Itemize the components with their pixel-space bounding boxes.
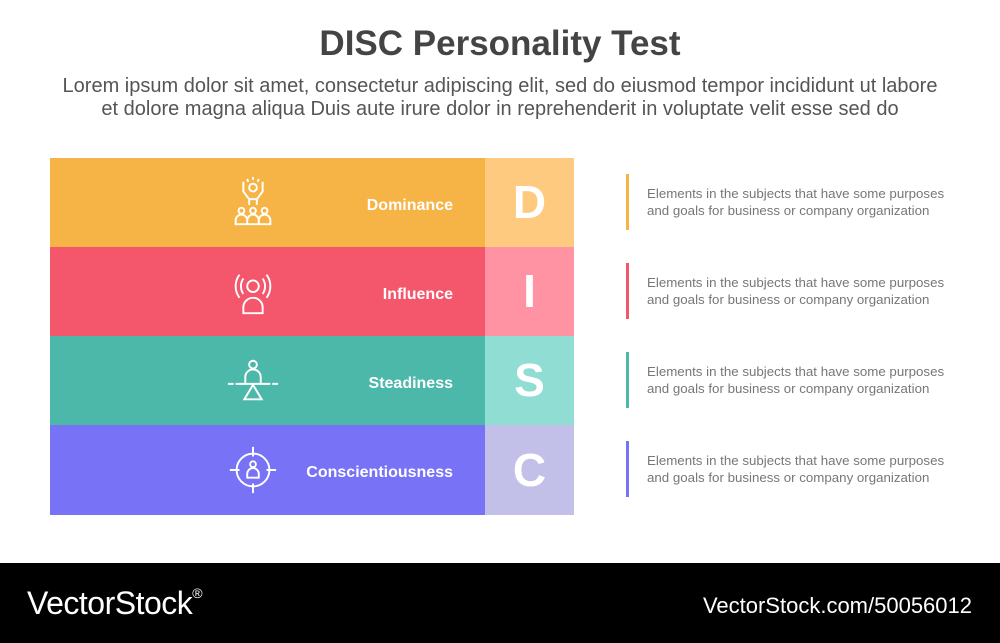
- row: Conscientiousness: Conscientiousness: [306, 464, 453, 481]
- row: Dominance: D: [513, 176, 546, 228]
- row: Influence: [50, 247, 574, 336]
- row: Influence: I: [523, 265, 536, 317]
- description: S: [626, 352, 944, 408]
- row: Steadiness: [50, 336, 574, 425]
- row: Steadiness: S: [514, 354, 545, 406]
- description: C: and goals for business or company organization: [647, 470, 929, 485]
- icon: broadcasting person: [234, 274, 272, 314]
- icon: cheering crowd: [234, 177, 272, 226]
- description: I: and goals for business or company organization: [647, 292, 929, 307]
- icon: target person: [230, 446, 276, 494]
- description: C: [626, 441, 944, 497]
- description: I: Elements in the subjects that have some purposes: [647, 275, 944, 290]
- description: D: Elements in the subjects that have some purposes: [647, 186, 944, 201]
- subtitle: Lorem ipsum dolor sit amet, consectetur adipiscing elit, sed do eiusmod tempor incididunt ut labore: [63, 75, 937, 97]
- title: DISC Personality Test: [319, 24, 681, 63]
- row: Dominance: Dominance: [367, 197, 453, 214]
- description: S: Elements in the subjects that have some purposes: [647, 364, 944, 379]
- footer bar: VectorStock®: [27, 585, 202, 621]
- footer bar: VectorStock.com/50056012: [703, 593, 972, 618]
- subtitle: [63, 75, 937, 120]
- description: C: Elements in the subjects that have some purposes: [647, 453, 944, 468]
- description: I: [626, 263, 944, 319]
- description: S: and goals for business or company organization: [647, 381, 929, 396]
- description: D: and goals for business or company organization: [647, 203, 929, 218]
- footer bar: [0, 563, 1000, 643]
- subtitle: et dolore magna aliqua Duis aute irure dolor in reprehenderit in voluptate velit esse sed do: [101, 98, 899, 120]
- icon: balance: [228, 360, 278, 400]
- row: Conscientiousness: [50, 425, 574, 515]
- row: Steadiness: Steadiness: [369, 375, 453, 392]
- row: Conscientiousness: C: [513, 444, 546, 496]
- row: Influence: Influence: [383, 286, 453, 303]
- row: Dominance: [50, 158, 574, 247]
- description: D: [626, 174, 944, 230]
